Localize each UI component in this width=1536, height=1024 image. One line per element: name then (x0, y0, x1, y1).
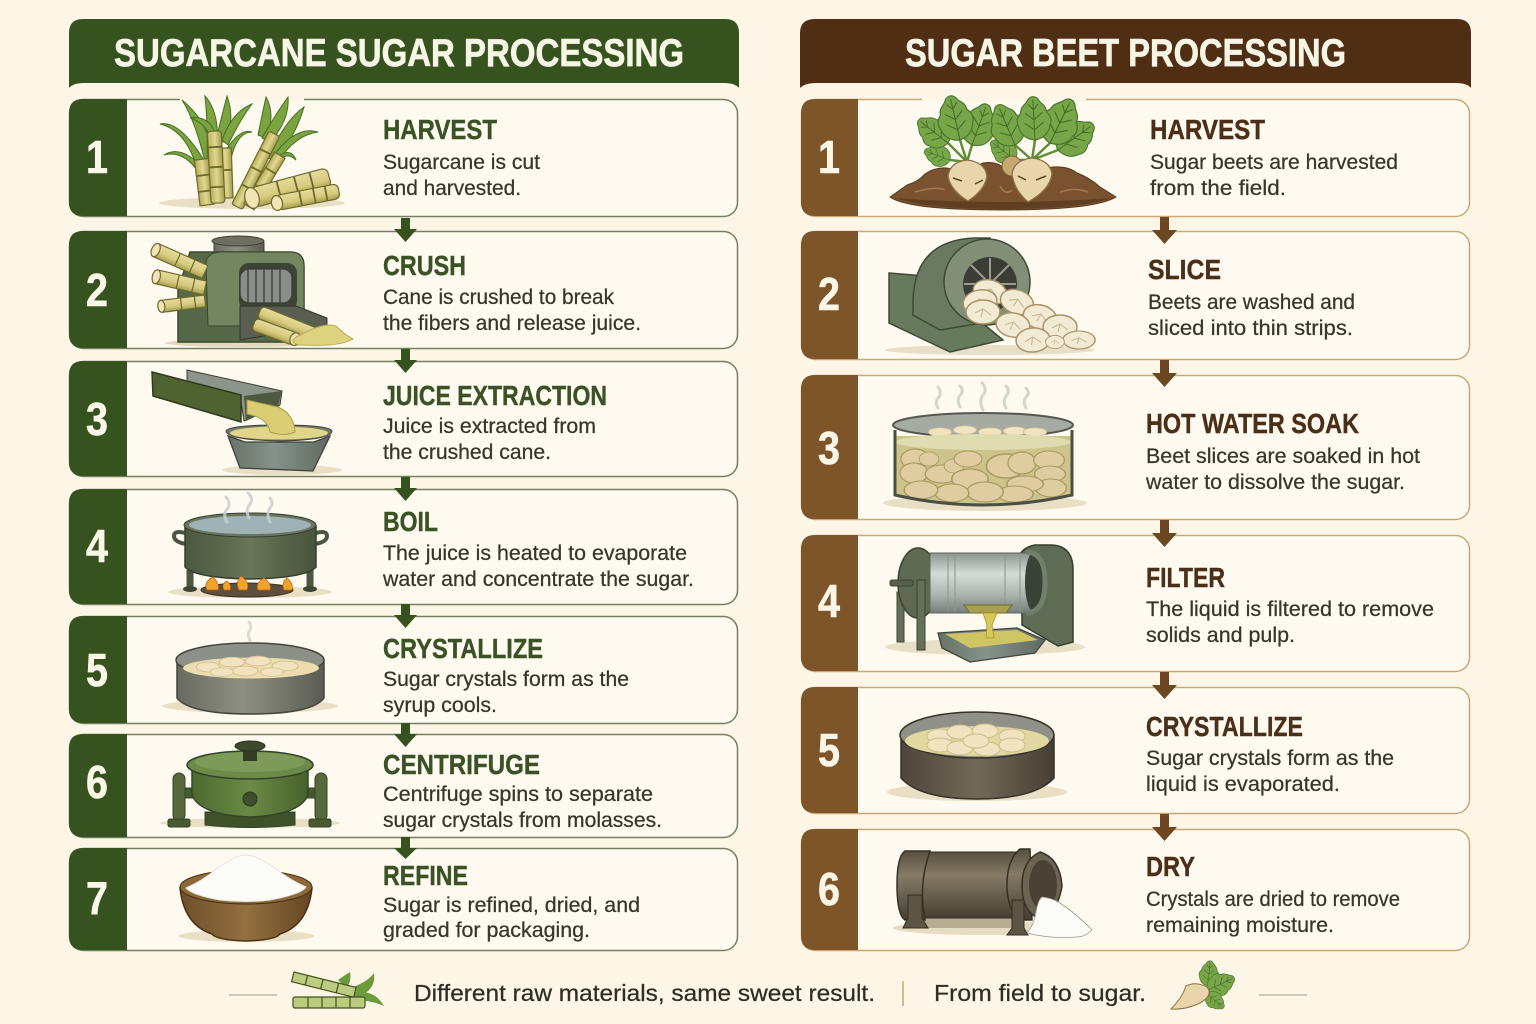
step 6: centrifuge: 6 (86, 756, 108, 808)
step text: Sugar crystals form as the (383, 668, 629, 691)
step text: JUICE EXTRACTION (383, 380, 607, 411)
step text (383, 633, 629, 717)
step 6: dry (801, 829, 1470, 950)
step text: CRUSH (383, 250, 466, 281)
step text: water to dissolve the sugar. (1145, 471, 1405, 494)
step text (1146, 851, 1400, 937)
step text (383, 114, 540, 200)
step text: liquid is evaporated. (1146, 773, 1340, 796)
step text: sugar crystals from molasses. (383, 809, 662, 832)
step text (383, 250, 641, 335)
icon: rotary dryer (893, 849, 1092, 938)
step text: remaining moisture. (1146, 914, 1334, 937)
step text (1148, 254, 1355, 340)
arrows: sugarcane flow (394, 218, 417, 859)
step text (383, 860, 640, 942)
step 3: juice extraction (69, 361, 738, 476)
step text: Sugarcane is cut (383, 151, 540, 174)
step 4: filter (801, 535, 1470, 672)
tagline: from field to sugar: From field to sugar. (934, 980, 1146, 1006)
panel: sugar beet processing (800, 19, 1471, 950)
step text: HARVEST (1150, 114, 1265, 145)
icon: cane crusher (149, 236, 353, 347)
step text: Beet slices are soaked in hot (1146, 445, 1420, 468)
step text: solids and pulp. (1146, 624, 1295, 647)
icon: sugar beets in soil (890, 91, 1116, 210)
step 7: refine: 7 (86, 872, 108, 924)
step text: water and concentrate the sugar. (382, 568, 694, 591)
step text (383, 380, 607, 464)
step text: HOT WATER SOAK (1146, 408, 1359, 439)
icon: rotary filter (885, 545, 1085, 662)
step 1: harvest: 1 (86, 131, 108, 183)
icon: soaking tub (883, 383, 1087, 511)
step text: Crystals are dried to remove (1146, 888, 1400, 911)
step text: CRYSTALLIZE (1146, 711, 1303, 742)
step text: REFINE (383, 860, 468, 891)
panel: sugarcane sugar processing (69, 19, 739, 950)
step 6: centrifuge (69, 734, 738, 838)
icon: juice chute and pan (152, 370, 342, 475)
step text: BOIL (383, 506, 438, 537)
step 4: boil: 4 (86, 520, 108, 572)
tagline: different raw materials: Different raw materials, same sweet result. (414, 980, 875, 1006)
heading: sugarcane sugar processing: SUGARCANE SUGAR PROCESSING (114, 32, 684, 75)
step 1: harvest (69, 96, 738, 216)
step 4: filter: 4 (818, 575, 840, 627)
arrows: sugar beet flow (1152, 217, 1177, 841)
icon: crystallizing pan (162, 622, 338, 714)
step text: FILTER (1146, 562, 1225, 593)
step text: The liquid is filtered to remove (1146, 598, 1434, 621)
step text: Sugar is refined, dried, and (383, 894, 640, 917)
step 5: crystallize: 5 (86, 644, 108, 696)
step 1: harvest (801, 91, 1470, 216)
step 3: hot water soak: 3 (818, 422, 840, 474)
step 1: harvest: 1 (818, 131, 840, 183)
icon: beet slicer (885, 238, 1095, 355)
step text (1145, 408, 1420, 494)
icon: bowl of sugar (178, 855, 314, 942)
step text (1146, 562, 1434, 647)
step text: and harvested. (383, 177, 521, 200)
step text: Beets are washed and (1148, 291, 1355, 314)
step text (1150, 114, 1398, 200)
step 2: slice (801, 231, 1470, 360)
step 4: boil (69, 489, 738, 604)
step text: Sugar crystals form as the (1146, 747, 1394, 770)
step text: Cane is crushed to break (383, 286, 614, 309)
step 5: crystallize (69, 616, 738, 724)
step text: the crushed cane. (383, 441, 551, 464)
step 5: crystallize (801, 687, 1470, 814)
icon: boiling pot (168, 493, 332, 598)
step text: from the field. (1150, 177, 1286, 200)
heading: sugarcane sugar processing (69, 19, 739, 88)
step text: sliced into thin strips. (1148, 317, 1353, 340)
step text (1146, 711, 1394, 796)
step 5: crystallize: 5 (818, 724, 840, 776)
step text: DRY (1146, 851, 1195, 882)
icon: small beet (1171, 960, 1239, 1014)
step 2: crush: 2 (86, 264, 108, 316)
step 3: juice extraction: 3 (86, 393, 108, 445)
step 3: hot water soak (801, 375, 1470, 520)
step text: Centrifuge spins to separate (383, 783, 653, 806)
step 7: refine (69, 848, 738, 950)
heading: sugar beet processing: SUGAR BEET PROCESSING (905, 32, 1346, 75)
step text: Sugar beets are harvested (1150, 151, 1398, 174)
step text: Juice is extracted from (383, 415, 596, 438)
step text: graded for packaging. (383, 919, 590, 942)
step text: CENTRIFUGE (383, 749, 540, 780)
heading: sugar beet processing (800, 19, 1471, 88)
footer tagline (229, 960, 1307, 1014)
step text (383, 749, 662, 832)
step text: The juice is heated to evaporate (383, 542, 687, 565)
step text (382, 506, 694, 591)
step text: SLICE (1148, 254, 1221, 285)
step 2: crush (69, 231, 738, 348)
step 6: dry: 6 (818, 863, 840, 915)
step text: the fibers and release juice. (383, 312, 641, 335)
icon: sugarcane (159, 96, 345, 211)
icon: centrifuge (160, 741, 340, 828)
step text: HARVEST (383, 114, 497, 145)
step 2: slice: 2 (818, 268, 840, 320)
step text: CRYSTALLIZE (383, 633, 543, 664)
icon: small sugarcane (292, 972, 384, 1008)
step text: syrup cools. (383, 694, 497, 717)
icon: crystallizing pan (887, 712, 1067, 801)
